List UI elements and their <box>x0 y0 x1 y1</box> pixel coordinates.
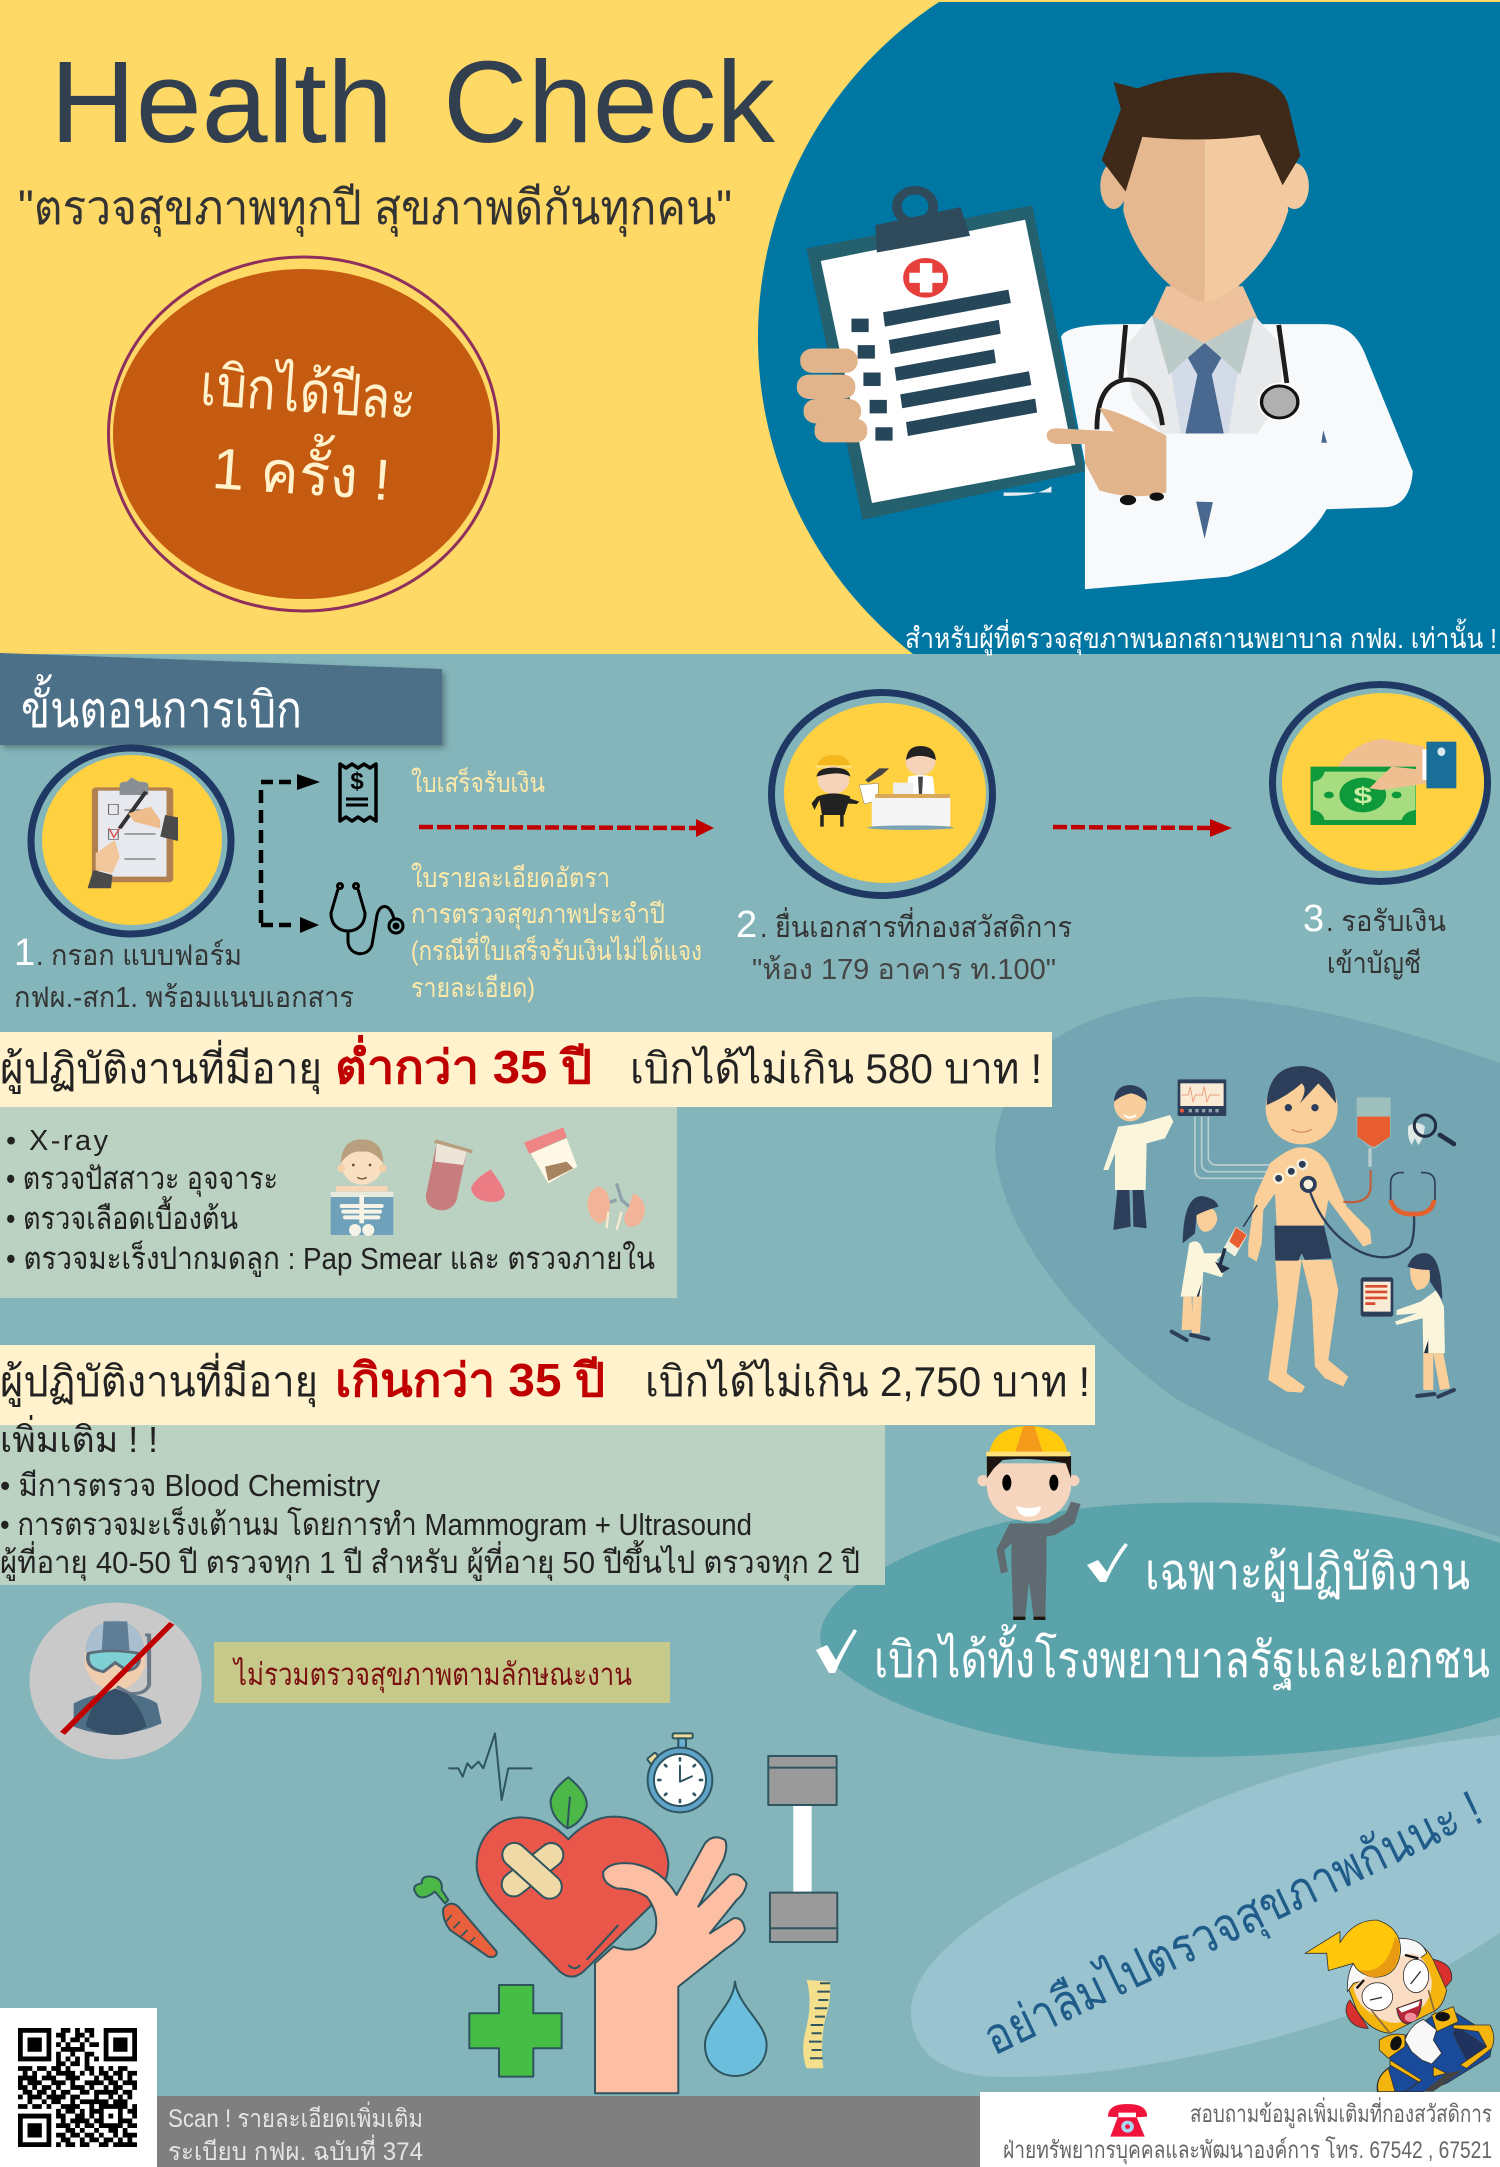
arrow: step 1 to step 2 <box>419 819 714 837</box>
eyes <box>1362 1983 1393 2011</box>
step 2 text: 2 <box>736 904 757 946</box>
step 1 text: 1 <box>14 932 35 974</box>
large background shape right <box>995 997 1500 1537</box>
under 35 list panel: • ตรวจมะเร็งปากมดลูก : Pap Smear และ ตรวจภายใน <box>6 1240 655 1277</box>
bandage <box>497 1838 568 1904</box>
icon: money in hand <box>1311 739 1456 825</box>
tooth and magnifier <box>1408 1115 1454 1145</box>
title: Check <box>443 37 776 167</box>
male doctor <box>1103 1085 1173 1230</box>
neck <box>1152 286 1257 343</box>
over 35 list panel: • มีการตรวจ Blood Chemistry <box>0 1468 380 1503</box>
over 35 bar: เกินกว่า 35 ปี <box>335 1354 605 1406</box>
section heading banner <box>0 653 442 745</box>
nurse with syringe <box>1172 1196 1257 1340</box>
under 35 bar: ต่ำกว่า 35 ปี <box>335 1035 592 1093</box>
hair <box>1305 1920 1401 1977</box>
icon: form on clipboard <box>88 777 178 888</box>
icons: x-ray, blood, stool, kidney <box>331 1127 645 1236</box>
nurse with chart <box>1361 1253 1454 1397</box>
IV bag <box>1343 1097 1391 1202</box>
sleeve <box>1169 436 1413 507</box>
connector arrows from step 1 <box>261 774 320 933</box>
label: rate detail document: การตรวจสุขภาพประจำปี <box>411 899 665 931</box>
red ear pieces <box>1433 1959 1452 1990</box>
header yellow panel <box>0 0 1500 654</box>
step 2 text <box>736 904 1072 986</box>
hair <box>1102 72 1300 192</box>
exclusion note <box>214 1642 670 1703</box>
dumbbell <box>768 1756 837 1942</box>
section heading banner: ขั้นตอนการเบิก <box>21 674 302 738</box>
step 3 text <box>1303 898 1446 980</box>
step 1 circle <box>31 748 231 934</box>
grey footer <box>157 2096 980 2167</box>
face <box>1123 130 1205 301</box>
under 35 list panel: • X-ray <box>6 1125 108 1157</box>
carrot <box>414 1876 497 1957</box>
ears <box>1100 163 1127 209</box>
over 35 list panel: • การตรวจมะเร็งเต้านม โดยการทำ Mammogram + Ultrasound <box>0 1506 752 1542</box>
leaf <box>551 1777 587 1828</box>
helmet <box>1348 1938 1447 2033</box>
badge: once a year: เบิกได้ปีละ <box>198 352 418 433</box>
step 1 text: กฟผ.-สก1. พร้อมแนบเอกสาร <box>14 982 354 1014</box>
over 35 list panel <box>0 1415 885 1585</box>
under 35 bar: เบิกได้ไม่เกิน 580 บาท ! <box>630 1045 1042 1092</box>
electrodes <box>1274 1160 1307 1183</box>
step 2 text: . ยื่นเอกสารที่กองสวัสดิการ <box>760 907 1072 944</box>
header blue shape <box>758 2 1500 654</box>
light blue slanted shape <box>911 1735 1500 2077</box>
doctor illustration <box>797 72 1413 589</box>
face <box>1353 1953 1432 2023</box>
health icons group <box>414 1733 837 2093</box>
green cross <box>469 1985 562 2077</box>
title <box>50 37 776 167</box>
title: Health <box>50 37 393 167</box>
measuring tape <box>803 1980 830 2068</box>
badge: once a year <box>108 257 498 611</box>
over 35 list panel: ผู้ที่อายุ 40-50 ปี ตรวจทุก 1 ปี สำหรับ ผู้ที่อายุ 50 ปีขึ้นไป ตรวจทุก 2 ปี <box>0 1540 860 1582</box>
tie <box>1185 343 1224 434</box>
shirt <box>1171 345 1238 434</box>
icon: stethoscope <box>331 884 403 954</box>
contact panel <box>980 2092 1500 2167</box>
arrow: step 2 to step 3 <box>1053 819 1232 837</box>
over 35 bar: ผู้ปฏิบัติงานที่มีอายุ <box>0 1353 318 1408</box>
over 35 bar <box>0 1345 1095 1425</box>
monitor <box>1178 1079 1300 1178</box>
icon: receipt <box>340 764 376 821</box>
mouth <box>1397 1999 1422 2024</box>
step 3 text: เข้าบัญชี <box>1327 948 1421 980</box>
label: rate detail document: (กรณีที่ใบเสร็จรับเงินไม่ได้แจง <box>411 932 702 966</box>
label: rate detail document: รายละเอียด) <box>411 973 535 1003</box>
under 35 bar: ผู้ปฏิบัติงานที่มีอายุ <box>0 1040 322 1095</box>
pulse line <box>448 1733 532 1800</box>
coat <box>1061 324 1413 589</box>
badge: once a year: 1 ครั้ง ! <box>210 427 393 513</box>
step 1 text <box>14 932 354 1014</box>
over 35 bar: เบิกได้ไม่เกิน 2,750 บาท ! <box>645 1358 1090 1405</box>
mascot <box>1305 1920 1494 2092</box>
icon: money in hand: $ <box>1353 784 1372 809</box>
step 3 circle <box>1272 684 1488 882</box>
holding hand <box>797 349 867 442</box>
under 35 bar <box>0 1032 1052 1107</box>
body <box>1377 2013 1493 2092</box>
lower tie <box>1196 501 1213 539</box>
stethoscope on patient <box>1302 1173 1435 1257</box>
lapels <box>1123 316 1281 434</box>
heart highlight <box>568 1925 618 1968</box>
worker mascot <box>977 1426 1081 1620</box>
pointing hand <box>1047 408 1166 496</box>
collar <box>1152 316 1255 375</box>
step 3 text: . รอรับเงิน <box>1326 906 1446 938</box>
gloves <box>1405 2019 1442 2064</box>
under 35 list panel <box>0 1107 677 1298</box>
label: rate detail document <box>411 862 702 1003</box>
icon: telephone <box>1108 2104 1147 2137</box>
label: rate detail document: ใบรายละเอียดอัตรา <box>411 862 610 893</box>
grey footer: Scan ! รายละเอียดเพิ่มเติม <box>168 2101 423 2133</box>
grey footer: ระเบียบ กฟผ. ฉบับที่ 374 <box>168 2134 423 2166</box>
step 3 text: 3 <box>1303 898 1324 940</box>
step 2 text: "ห้อง 179 อาคาร ท.100" <box>752 954 1056 986</box>
under 35 list panel: • ตรวจเลือดเบื้องต้น <box>6 1196 238 1236</box>
stethoscope <box>1097 325 1287 429</box>
stopwatch <box>647 1733 712 1812</box>
step 1 text: . กรอก แบบฟอร์ม <box>36 939 242 972</box>
QR code <box>18 2030 137 2145</box>
under 35 list panel: • ตรวจปัสสาวะ อุจจาระ <box>6 1161 278 1198</box>
water drop <box>705 1982 767 2076</box>
exclusion note: ไม่รวมตรวจสุขภาพตามลักษณะงาน <box>231 1657 632 1694</box>
icon: receipt: $ <box>350 768 364 795</box>
QR code panel <box>0 2008 157 2167</box>
clipboard <box>806 205 1085 520</box>
step 2 circle <box>772 692 992 896</box>
tears <box>1372 1990 1435 2033</box>
hand <box>595 1837 747 2093</box>
patient <box>1248 1066 1372 1393</box>
label: receipt: ใบเสร็จรับเงิน <box>411 765 545 798</box>
over 35 list panel: เพิ่มเติม ! ! <box>0 1415 158 1460</box>
teal blob behind checks <box>820 1502 1500 1757</box>
icon: no occupational check (diver) <box>29 1603 202 1759</box>
icon: officer at desk <box>812 746 954 830</box>
subtitle: "ตรวจสุขภาพทุกปี สุขภาพดีกันทุกคน" <box>18 182 732 237</box>
heart <box>477 1817 668 1977</box>
medical illustration <box>1103 1066 1454 1397</box>
shadow under clipboard <box>1004 486 1051 496</box>
